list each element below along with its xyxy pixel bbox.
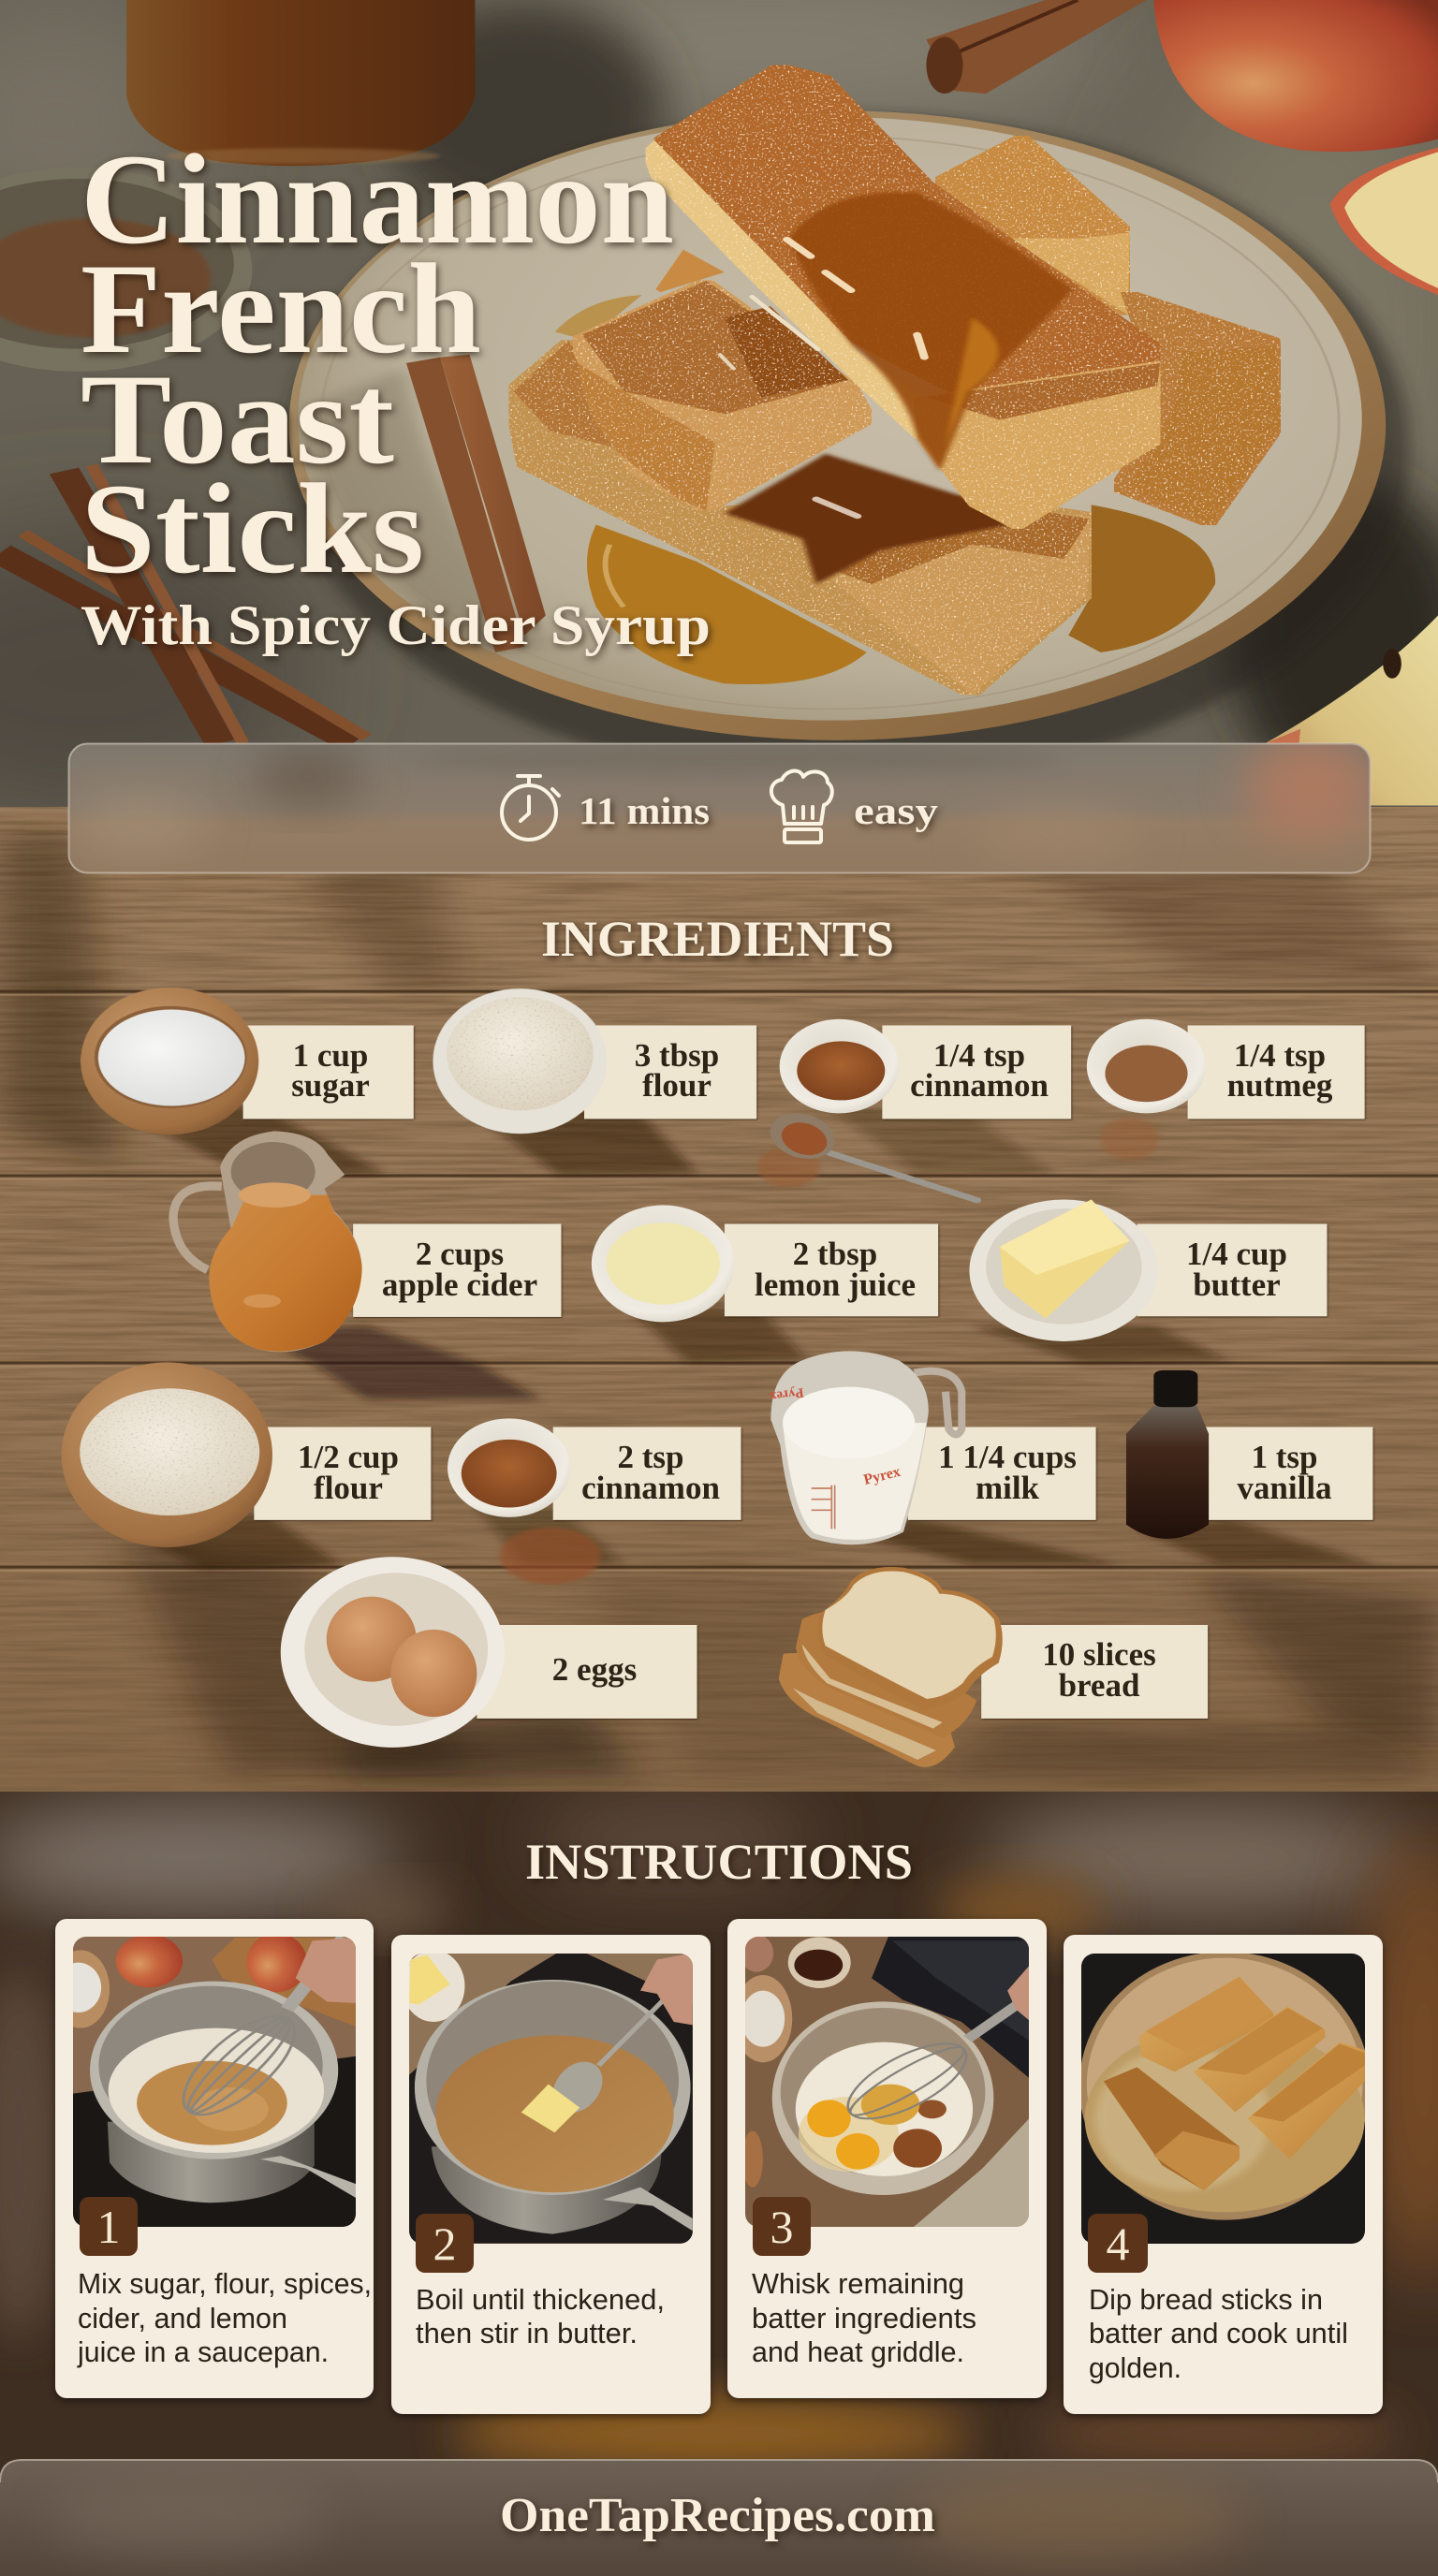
ingredient: sugar bowl — [81, 988, 258, 1134]
apple slice — [1329, 148, 1438, 295]
cider jar — [126, 0, 475, 166]
toast piece behind — [655, 250, 725, 292]
ingredient: flour bowl large — [62, 1362, 272, 1547]
ingredient: nutmeg bowl — [1087, 1019, 1206, 1113]
ingredient: measuring cup and bread — [769, 1351, 1003, 1767]
website: OneTapRecipes.com — [500, 2489, 935, 2542]
1/4 tsp cinnamon: 1/4 tsp — [933, 1037, 1025, 1074]
difficulty label: easy — [854, 789, 939, 832]
panel: wood table — [0, 807, 1438, 1793]
cinnamon spice bowl — [0, 168, 252, 372]
step 2 text — [416, 2283, 665, 2349]
toast stick bottom — [509, 341, 1092, 695]
1 1/4 cups milk — [938, 1439, 1077, 1506]
step 4 text: Dip bread sticks in — [1089, 2283, 1323, 2316]
bread slices — [779, 1567, 1003, 1767]
step 1 photo — [51, 1933, 357, 2229]
step 3 photo — [734, 1935, 1030, 2229]
panel: ingredient label cards — [243, 1025, 1372, 1719]
syrup pools — [555, 295, 1215, 684]
ingredient: lemon juice bowl — [592, 1206, 735, 1322]
3 tbsp flour — [635, 1037, 719, 1104]
3 tbsp flour: flour — [642, 1067, 712, 1104]
1 tsp vanilla: 1 tsp — [1251, 1439, 1318, 1475]
1/2 cup flour: 1/2 cup — [298, 1439, 399, 1475]
heading: ingredients: INGREDIENTS — [541, 911, 894, 967]
1/4 tsp cinnamon: cinnamon — [910, 1067, 1049, 1104]
panel: ingredient illustrations — [81, 988, 1206, 1200]
panel: step 3 card — [727, 1919, 1047, 2398]
toast stick right — [1114, 292, 1281, 525]
ingredient: apple cider pitcher — [173, 1131, 362, 1352]
2 cups apple cider — [382, 1236, 537, 1303]
panel: footer — [0, 2460, 1438, 2576]
panel: time and difficulty bar — [68, 735, 1376, 873]
panel: step 4 card — [1064, 1935, 1383, 2414]
label box: vanilla — [1201, 1427, 1372, 1520]
step 3 number badge: 3 — [770, 2201, 794, 2253]
1 1/4 cups milk: milk — [976, 1470, 1040, 1506]
ingredient: eggs bowl — [281, 1557, 505, 1748]
subtitle: With Spicy Cider Syrup — [81, 594, 711, 656]
2 tbsp lemon juice: 2 tbsp — [793, 1236, 877, 1272]
step 1 number badge: 1 — [97, 2201, 120, 2253]
1 cup sugar: sugar — [291, 1067, 370, 1104]
1 1/4 cups milk: 1 1/4 cups — [938, 1439, 1077, 1475]
icon: chef hat — [771, 771, 832, 842]
label box: nutmeg — [1188, 1025, 1365, 1119]
1/4 tsp nutmeg: nutmeg — [1227, 1067, 1333, 1104]
step 3 text — [752, 2267, 976, 2368]
step 2 number badge: 2 — [433, 2217, 457, 2270]
toast stick left — [573, 281, 872, 510]
step 1 text: juice in a saucepan. — [77, 2335, 329, 2368]
label box: lemon juice — [725, 1224, 938, 1316]
label box: flour 2 — [254, 1427, 431, 1520]
label box: cinnamon 2 — [553, 1427, 741, 1520]
title — [81, 127, 674, 600]
label box: cinnamon — [882, 1025, 1071, 1119]
label box: flour — [584, 1025, 756, 1119]
3 tbsp flour: 3 tbsp — [635, 1037, 719, 1074]
step 1 number badge — [80, 2197, 138, 2256]
step 3 text: Whisk remaining — [752, 2267, 964, 2300]
2 cups apple cider: apple cider — [382, 1266, 537, 1303]
1/4 tsp nutmeg: 1/4 tsp — [1234, 1037, 1326, 1074]
2 tsp cinnamon — [581, 1439, 720, 1506]
1/2 cup flour: flour — [314, 1470, 383, 1506]
syrup under sticks — [725, 454, 1009, 584]
step 2 text: then stir in butter. — [416, 2317, 638, 2349]
title: Toast — [81, 347, 394, 490]
apple — [1153, 0, 1438, 152]
ingredient: spoon with cinnamon — [757, 1106, 976, 1200]
1/2 cup flour — [298, 1439, 399, 1506]
step 3 text: and heat griddle. — [752, 2335, 964, 2368]
cinnamon sticks left — [0, 465, 367, 743]
ingredient label text — [291, 1037, 1333, 1704]
step 4 number badge — [1088, 2214, 1148, 2273]
1 tsp vanilla — [1237, 1439, 1332, 1506]
1/4 cup butter: butter — [1193, 1266, 1281, 1303]
label box: sugar — [243, 1025, 414, 1119]
time label: 11 mins — [579, 789, 710, 832]
toast stick top — [646, 66, 1160, 529]
1 cup sugar — [291, 1037, 370, 1104]
panel: hero photo — [0, 0, 1438, 824]
label box: bread — [981, 1625, 1208, 1719]
ingredient: cinnamon bowl large — [448, 1418, 601, 1584]
2 eggs: 2 eggs — [552, 1651, 637, 1688]
step 1 text: cider, and lemon — [78, 2302, 287, 2334]
panel: instructions background — [0, 1792, 1438, 2576]
plate cinnamon sticks — [406, 355, 546, 652]
2 tbsp lemon juice — [755, 1236, 916, 1303]
step 4 text: golden. — [1089, 2351, 1181, 2384]
title: Cinnamon — [81, 127, 674, 271]
step 2 number badge — [416, 2214, 474, 2273]
1 tsp vanilla: vanilla — [1237, 1470, 1332, 1506]
measuring cup of milk: Pyrex — [862, 1464, 902, 1488]
1/4 cup butter — [1186, 1236, 1287, 1303]
step 3 text: batter ingredients — [752, 2302, 976, 2334]
cinnamon stick top right — [926, 0, 1146, 94]
label box: butter — [1137, 1224, 1327, 1316]
step 3 number badge — [753, 2197, 811, 2256]
ingredient: cinnamon bowl — [780, 1019, 899, 1113]
step 4 text — [1089, 2283, 1348, 2384]
step 4 number badge: 4 — [1107, 2217, 1129, 2270]
10 slices bread: bread — [1059, 1667, 1140, 1704]
ingredient: flour bowl — [433, 988, 607, 1134]
ingredient: butter plate — [969, 1199, 1158, 1341]
apple wedge — [1266, 616, 1438, 806]
toast stick back — [935, 136, 1130, 315]
2 tsp cinnamon: 2 tsp — [618, 1439, 683, 1475]
label box: eggs — [477, 1625, 697, 1719]
1/4 tsp nutmeg — [1227, 1037, 1333, 1104]
2 tsp cinnamon: cinnamon — [581, 1470, 720, 1506]
step 4 photo — [1079, 1952, 1371, 2245]
step 4 text: batter and cook until — [1089, 2317, 1348, 2349]
10 slices bread — [1042, 1636, 1156, 1704]
title: French — [81, 237, 481, 380]
syrup glaze — [720, 192, 1073, 516]
heading: instructions: INSTRUCTIONS — [525, 1834, 913, 1890]
step 2 text: Boil until thickened, — [416, 2283, 665, 2316]
panel: step 1 card — [51, 1919, 374, 2398]
2 cups apple cider: 2 cups — [416, 1236, 504, 1272]
step 1 text — [77, 2267, 372, 2368]
1/4 tsp cinnamon — [910, 1037, 1049, 1104]
measuring cup of milk — [769, 1351, 961, 1544]
plate — [287, 110, 1410, 783]
icon: stopwatch — [502, 776, 559, 840]
spice dust — [1101, 1118, 1159, 1161]
panel: step 2 card — [391, 1935, 711, 2414]
ingredient: vanilla bottle — [1126, 1370, 1209, 1539]
2 tbsp lemon juice: lemon juice — [755, 1266, 916, 1303]
title: Sticks — [81, 457, 424, 600]
step 1 text: Mix sugar, flour, spices, — [78, 2267, 372, 2300]
label box: milk — [908, 1427, 1096, 1520]
measuring cup of milk: Pyrex — [769, 1384, 804, 1404]
1/4 cup butter: 1/4 cup — [1186, 1236, 1287, 1272]
label box: apple cider — [353, 1224, 562, 1317]
1 cup sugar: 1 cup — [293, 1037, 368, 1074]
step 2 photo — [403, 1950, 694, 2245]
object shadows — [119, 1105, 1375, 1570]
10 slices bread: 10 slices — [1042, 1636, 1156, 1673]
